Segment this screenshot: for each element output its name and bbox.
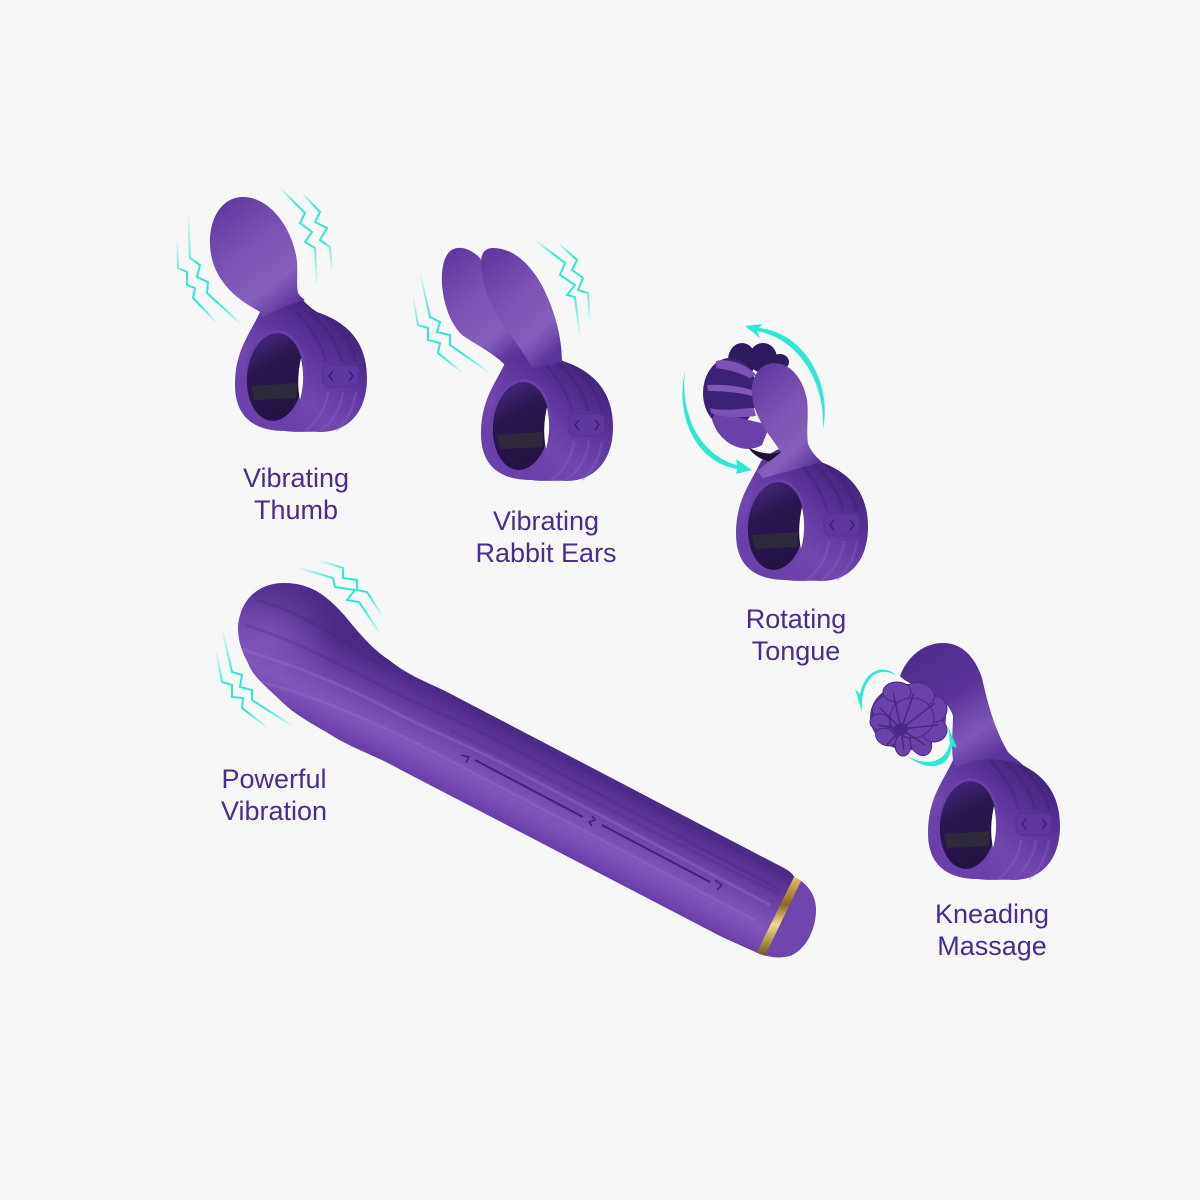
thumb head <box>210 197 305 318</box>
vibration lines: thumb left <box>177 213 242 325</box>
label: rotating tongue: Tongue <box>752 636 840 666</box>
tongue flower <box>703 343 789 462</box>
product: rotating tongue ring <box>682 324 868 581</box>
ribs <box>243 600 790 920</box>
product: vibrating rabbit ears ring <box>413 240 613 481</box>
end cap <box>758 876 816 957</box>
rotation arrow: lower <box>907 726 957 766</box>
label: rotating tongue: Rotating <box>746 604 846 634</box>
label: vibrating rabbit ears: Rabbit Ears <box>475 538 617 568</box>
vibration lines: wand top <box>296 560 383 635</box>
right ear <box>481 248 562 368</box>
label: powerful vibration: Vibration <box>221 796 327 826</box>
vibration lines: rabbit right <box>535 240 590 338</box>
rotation arrow: upper <box>855 670 897 712</box>
ring body <box>736 442 868 581</box>
vibration lines: thumb right <box>280 188 332 287</box>
wand body <box>238 583 796 955</box>
label: kneading massage: Kneading <box>935 899 1049 929</box>
ring body <box>481 342 613 481</box>
label: vibrating rabbit ears: Vibrating <box>493 506 599 536</box>
head highlight <box>238 584 322 686</box>
label: vibrating thumb: Thumb <box>254 495 338 525</box>
ring body <box>928 741 1060 880</box>
kneading knob <box>868 679 947 759</box>
hook head <box>900 643 1024 768</box>
touch control strip <box>461 755 722 890</box>
product: vibrating thumb ring <box>177 188 367 432</box>
label: powerful vibration: Powerful <box>221 764 327 794</box>
ring body <box>235 293 367 432</box>
label: kneading massage: Massage <box>937 931 1047 961</box>
label: vibrating thumb: Vibrating <box>243 463 349 493</box>
gold band <box>757 877 801 956</box>
left ear <box>442 248 525 365</box>
product: kneading massage ring <box>855 643 1060 880</box>
rotation arrow: left <box>682 371 752 474</box>
product: main wand <box>198 560 816 957</box>
vibration lines: wand left <box>216 628 294 728</box>
vibration lines: rabbit left <box>413 273 490 373</box>
tongue head <box>752 363 822 478</box>
rotation arrow: top <box>745 324 825 429</box>
